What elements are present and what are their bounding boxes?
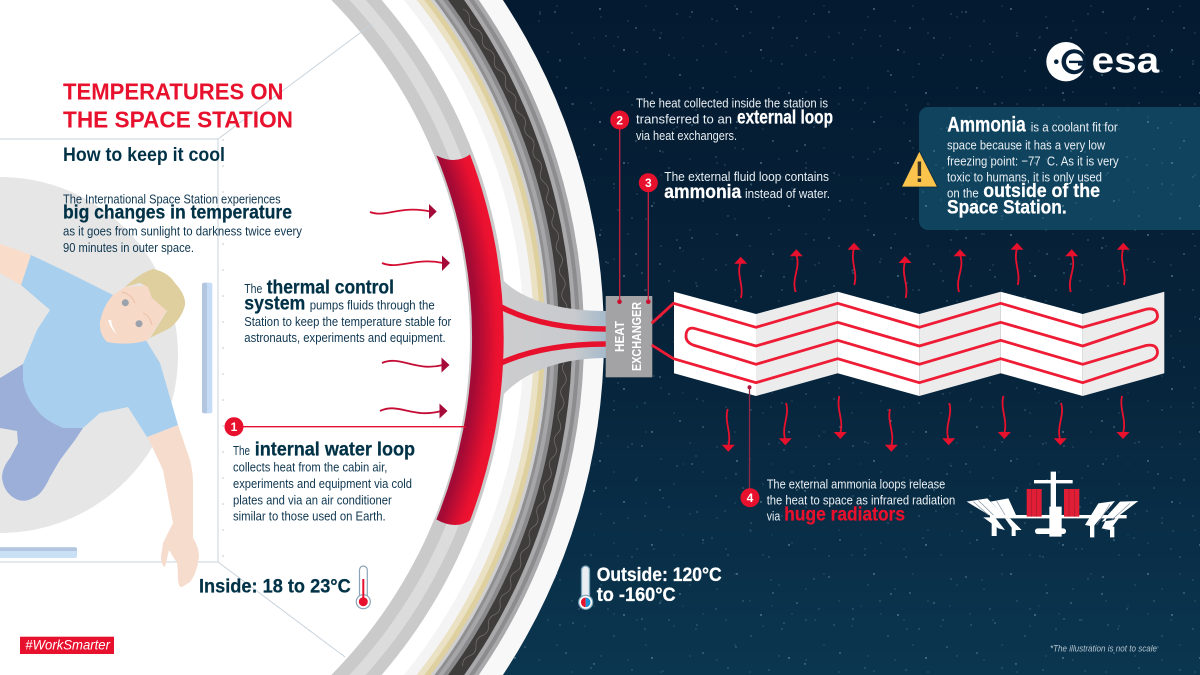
right arm and hand [147,425,199,587]
external loop text: transferred to an [636,112,732,127]
inside temperature label: Inside: 18 to 23°C [199,577,351,598]
radiators text: huge radiators [784,505,905,526]
internal water loop text: plates and via an air conditioner [233,492,392,507]
external loop text: external loop [737,107,833,128]
ammonia box text: outside of the [983,181,1100,202]
icon: inside thermometer [356,566,370,609]
callout 4 marker and leader: 4 [747,491,754,505]
heat exchanger: EXCHANGER [629,302,644,371]
internal water loop text: internal water loop [255,439,415,460]
thermal control text: Station to keep the temperature stable for [244,314,452,329]
ammonia text: The external fluid loop contains [664,169,829,184]
intro text: as it goes from sunlight to darkness twice every [63,224,302,239]
internal water loop text [233,439,415,524]
radiators text [767,476,955,526]
thermal control text: The [244,281,262,296]
callout 1 marker and leader: 1 [231,420,238,434]
astronaut backdrop circle [0,177,178,533]
radiator panels [674,292,1164,396]
icon: warning triangle [902,151,938,187]
intro text: 90 minutes in outer space. [63,240,194,255]
station hull cross-section [0,0,604,675]
external loop text: The heat collected inside the station is [636,95,828,110]
internal water loop text: experiments and equipment via cold [233,476,412,491]
wall handle: horizontal [0,547,77,558]
callout 4 marker and leader [740,385,760,507]
outside temperature label: to -160°C [597,585,676,606]
ESA logo: esa [1092,39,1160,80]
intro text: The International Space Station experiences [63,191,281,206]
ammonia box text: space because it has a very low [947,137,1106,152]
ammonia box text: Space Station. [947,197,1067,218]
ammonia box text [947,114,1119,218]
thermal control text: pumps fluids through the [310,298,435,312]
callout 3 marker and leader: 3 [645,176,652,190]
internal water loop text: similar to those used on Earth. [233,509,386,524]
title: THE SPACE STATION [63,106,293,132]
cabin heat arrow 3 [382,358,450,372]
panel: ammonia box [919,107,1200,230]
heat exchanger [606,296,652,377]
ammonia box text: freezing point: −77 C. As it is very [947,154,1119,169]
ammonia box text: on the [947,186,979,201]
radiators text: the heat to space as infrared radiation [767,493,955,508]
left arm [0,244,31,285]
module interior outline [0,24,372,657]
cabin heat arrow 1 [370,204,437,219]
trousers [0,364,83,501]
subtitle: How to keep it cool [63,145,225,166]
icon: outside thermometer [579,566,593,609]
footnote: *The illustration is not to scale [1050,644,1157,654]
thermal control text [244,277,452,345]
eyebrows [122,292,152,325]
external loop text: via heat exchangers. [636,128,737,143]
icon: space station [967,472,1138,537]
ammonia text: ammonia [664,182,742,203]
cabin heat arrow 2 [382,256,450,271]
thermal control text: thermal control [267,277,394,298]
callout 2 marker and leader: 2 [616,113,623,127]
ESA logo [1046,39,1160,81]
eyes [122,299,142,327]
internal water loop: red band [436,154,504,525]
thermal control text: astronauts, experiments and equipment. [244,330,446,345]
radiators text: via [767,509,781,524]
outside temperature label: Outside: 120°C [597,565,722,586]
smile [108,320,117,334]
heat arrows: down [722,396,1130,452]
pipes to heat exchanger [501,307,606,363]
ammonia text [664,169,830,203]
ammonia box text: toxic to humans, it is only used [947,170,1102,185]
cabin heat arrow 4 [380,404,448,418]
external loop text [636,95,833,143]
outside temperature label [597,565,722,606]
thermal control text: system [244,293,305,314]
heat exchanger: HEAT [612,321,627,352]
internal water loop text: The [233,443,250,458]
intro text [63,191,302,255]
external ammonia loop [652,303,1158,383]
callout 2 marker and leader [610,110,629,304]
face [100,285,167,344]
hair [125,269,185,338]
astronaut [0,244,199,587]
callout 3 marker and leader [639,173,658,304]
radiators text: The external ammonia loops release [767,476,945,491]
pipe funnel [497,277,606,402]
shirt [21,255,178,437]
ammonia text: instead of water. [745,186,830,201]
title [63,78,293,132]
hashtag badge: #WorkSmarter [25,638,110,652]
title: TEMPERATURES ON [63,78,284,104]
callout 1 marker and leader [224,417,470,436]
intro text: big changes in temperature [63,203,292,224]
internal water loop text: collects heat from the cabin air, [233,460,387,475]
heat arrows: up [734,243,1130,298]
ammonia box text: is a coolant fit for [1031,120,1118,135]
ammonia box text: Ammonia [947,114,1026,137]
wall handle: vertical [202,283,212,413]
